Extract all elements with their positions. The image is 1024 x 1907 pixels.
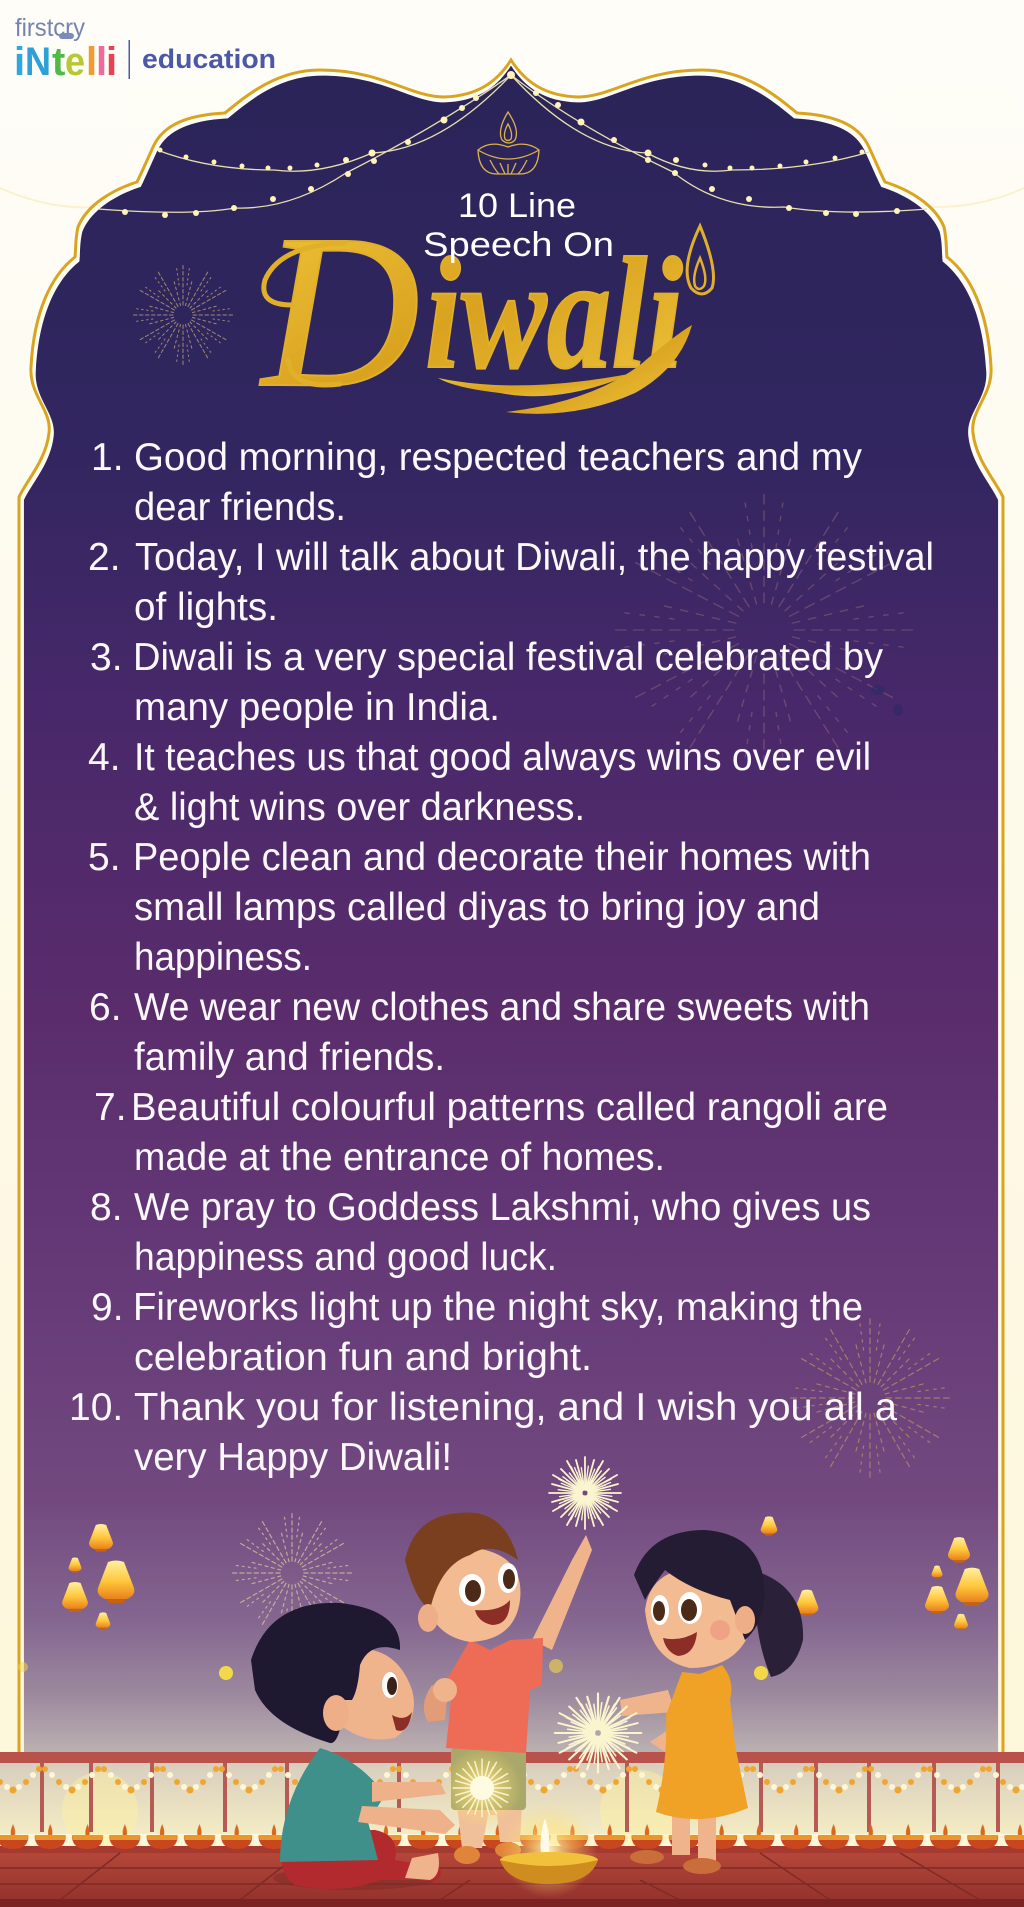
speech list: small lamps called diyas to bring joy and — [134, 886, 820, 929]
lamp glows on railing — [62, 1770, 680, 1850]
sky lanterns: centre — [761, 1516, 818, 1616]
railing background — [0, 1762, 1024, 1834]
marigold garland — [0, 1765, 1024, 1795]
firework: lower right — [790, 1318, 950, 1478]
speech list: Today, I will talk about Diwali, the happy festival — [135, 536, 934, 579]
speech list: Fireworks light up the night sky, making the — [133, 1286, 863, 1329]
row of diyas — [0, 1824, 1024, 1850]
title: 10 Line Speech On: Speech On — [423, 226, 614, 264]
speech list: It teaches us that good always wins over evil — [134, 736, 871, 779]
icon: gold flame — [687, 226, 714, 294]
logo: firstcry — [15, 14, 85, 42]
sky lanterns: left — [62, 1524, 134, 1629]
title: 10 Line Speech On — [423, 187, 614, 264]
speech list: happiness. — [134, 936, 312, 979]
railing top bar — [0, 1752, 1024, 1763]
character: girl — [620, 1530, 803, 1874]
speech list: Good morning, respected teachers and my — [134, 436, 862, 479]
speech list: We pray to Goddess Lakshmi, who gives us — [134, 1186, 871, 1229]
speech list: 1. — [91, 436, 124, 479]
speech list: of lights. — [134, 586, 278, 629]
gold flourishes — [264, 243, 345, 385]
logo: N — [25, 40, 51, 84]
speech list: People clean and decorate their homes with — [133, 836, 871, 879]
speech list: Thank you for listening, and I wish you all a — [134, 1386, 897, 1429]
speech list: We wear new clothes and share sweets with — [134, 986, 870, 1029]
speech list: celebration fun and bright. — [134, 1336, 592, 1379]
speech list: 5. — [88, 836, 121, 879]
title: Diwali gold script — [259, 189, 683, 433]
speech list: 6. — [89, 986, 122, 1029]
firework: top left — [133, 265, 233, 365]
speech list: very Happy Diwali! — [134, 1436, 452, 1479]
logo: l — [96, 40, 107, 84]
light strings — [98, 71, 927, 218]
firework: lower left — [232, 1513, 352, 1633]
character: boy sitting — [251, 1603, 455, 1890]
speech list — [69, 436, 934, 1479]
logo: i — [14, 40, 25, 84]
speech list: many people in India. — [134, 686, 500, 729]
faint outer light strings — [0, 188, 1024, 207]
floor — [0, 1846, 1024, 1907]
icon: diya line art — [478, 112, 539, 174]
logo: i — [106, 40, 117, 84]
logo: t — [52, 40, 65, 84]
logo: e — [65, 40, 85, 84]
sky lanterns: right — [925, 1537, 989, 1630]
swash underlines — [438, 325, 692, 414]
logo: l — [86, 40, 97, 84]
firework: large behind text — [614, 493, 914, 767]
speech list: 8. — [90, 1186, 123, 1229]
sparkler: girl — [555, 1693, 641, 1773]
speech list: 2. — [88, 536, 121, 579]
speech list: 10. — [69, 1386, 123, 1429]
sparkler: glowing centre — [442, 1748, 522, 1828]
speech list: family and friends. — [134, 1036, 445, 1079]
speech list: Beautiful colourful patterns called rangoli are — [131, 1086, 888, 1129]
speech list: happiness and good luck. — [134, 1236, 557, 1279]
glowing dots — [18, 1659, 768, 1680]
logo: education — [142, 44, 276, 74]
speech list: 9. — [91, 1286, 124, 1329]
speech list: made at the entrance of homes. — [134, 1136, 665, 1179]
logo — [14, 14, 276, 84]
speech list: 3. — [90, 636, 123, 679]
speech list: 7. — [94, 1086, 127, 1129]
character: boy standing — [405, 1513, 592, 1864]
dark smudge near firework — [871, 685, 903, 716]
title: Diwali gold script: iwali — [425, 224, 683, 402]
speech list: Diwali is a very special festival celebrated by — [133, 636, 883, 679]
speech list: dear friends. — [134, 486, 346, 529]
front diya — [500, 1802, 598, 1898]
sparkler: raised — [549, 1457, 621, 1529]
title: Diwali gold script: D — [259, 189, 420, 433]
speech list: 4. — [88, 736, 121, 779]
speech list: & light wins over darkness. — [134, 786, 585, 829]
title: 10 Line Speech On: 10 Line — [458, 187, 576, 225]
railing posts — [40, 1762, 1000, 1832]
